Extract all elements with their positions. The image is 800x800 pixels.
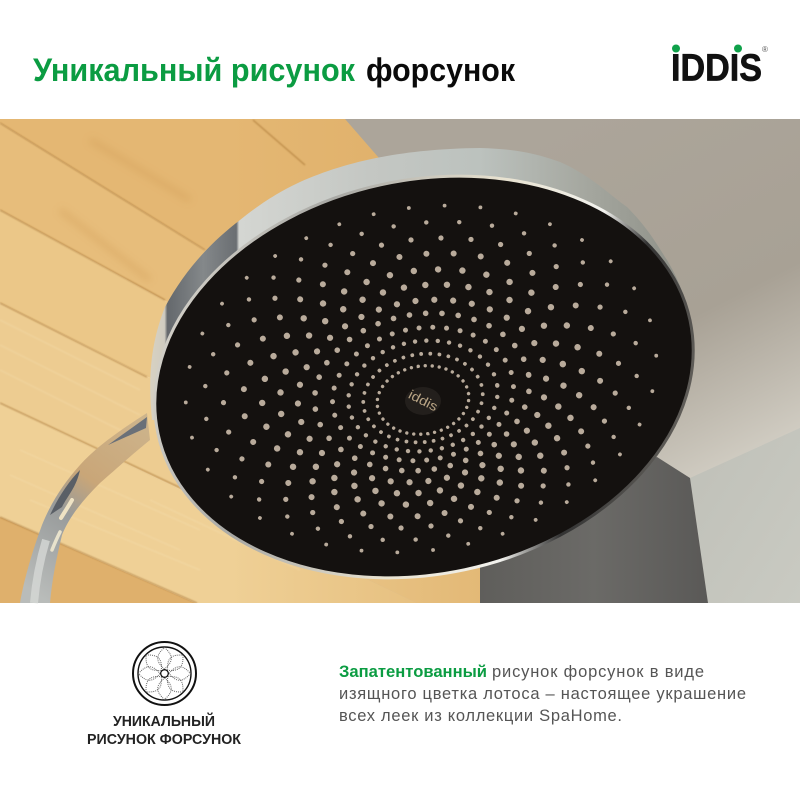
grain — [0, 320, 300, 570]
icon: lotus nozzle pattern — [133, 642, 196, 705]
photo: shower head on wood and concrete — [0, 119, 800, 604]
wall background — [340, 119, 800, 603]
logo: IDDIS: IDDIS — [671, 48, 762, 90]
description text: всех леек из коллекции SpaHome. — [339, 707, 622, 725]
description text: Запатентованный — [339, 663, 487, 681]
chrome rim — [150, 148, 692, 420]
description text — [339, 663, 746, 725]
white panel — [690, 428, 800, 603]
icon caption: РИСУНОК ФОРСУНОК — [87, 732, 241, 748]
description text: изящного цветка лотоса – настоящее украшение — [339, 685, 746, 703]
center logo on nozzle plate: iddis — [406, 387, 441, 415]
title: форсунок — [366, 52, 516, 88]
black nozzle plate — [117, 128, 731, 626]
chrome arm — [20, 413, 150, 603]
logo: IDDIS: ® — [762, 45, 768, 54]
icon caption: УНИКАЛЬНЫЙ — [113, 712, 215, 730]
title — [33, 52, 516, 88]
wood planks — [0, 119, 480, 603]
icon caption — [87, 712, 241, 748]
concrete column — [480, 457, 708, 603]
title: Уникальный рисунок — [33, 52, 356, 88]
description text: рисунок форсунок в виде — [492, 663, 704, 681]
nozzle dots — [158, 169, 684, 589]
seams — [0, 120, 305, 603]
